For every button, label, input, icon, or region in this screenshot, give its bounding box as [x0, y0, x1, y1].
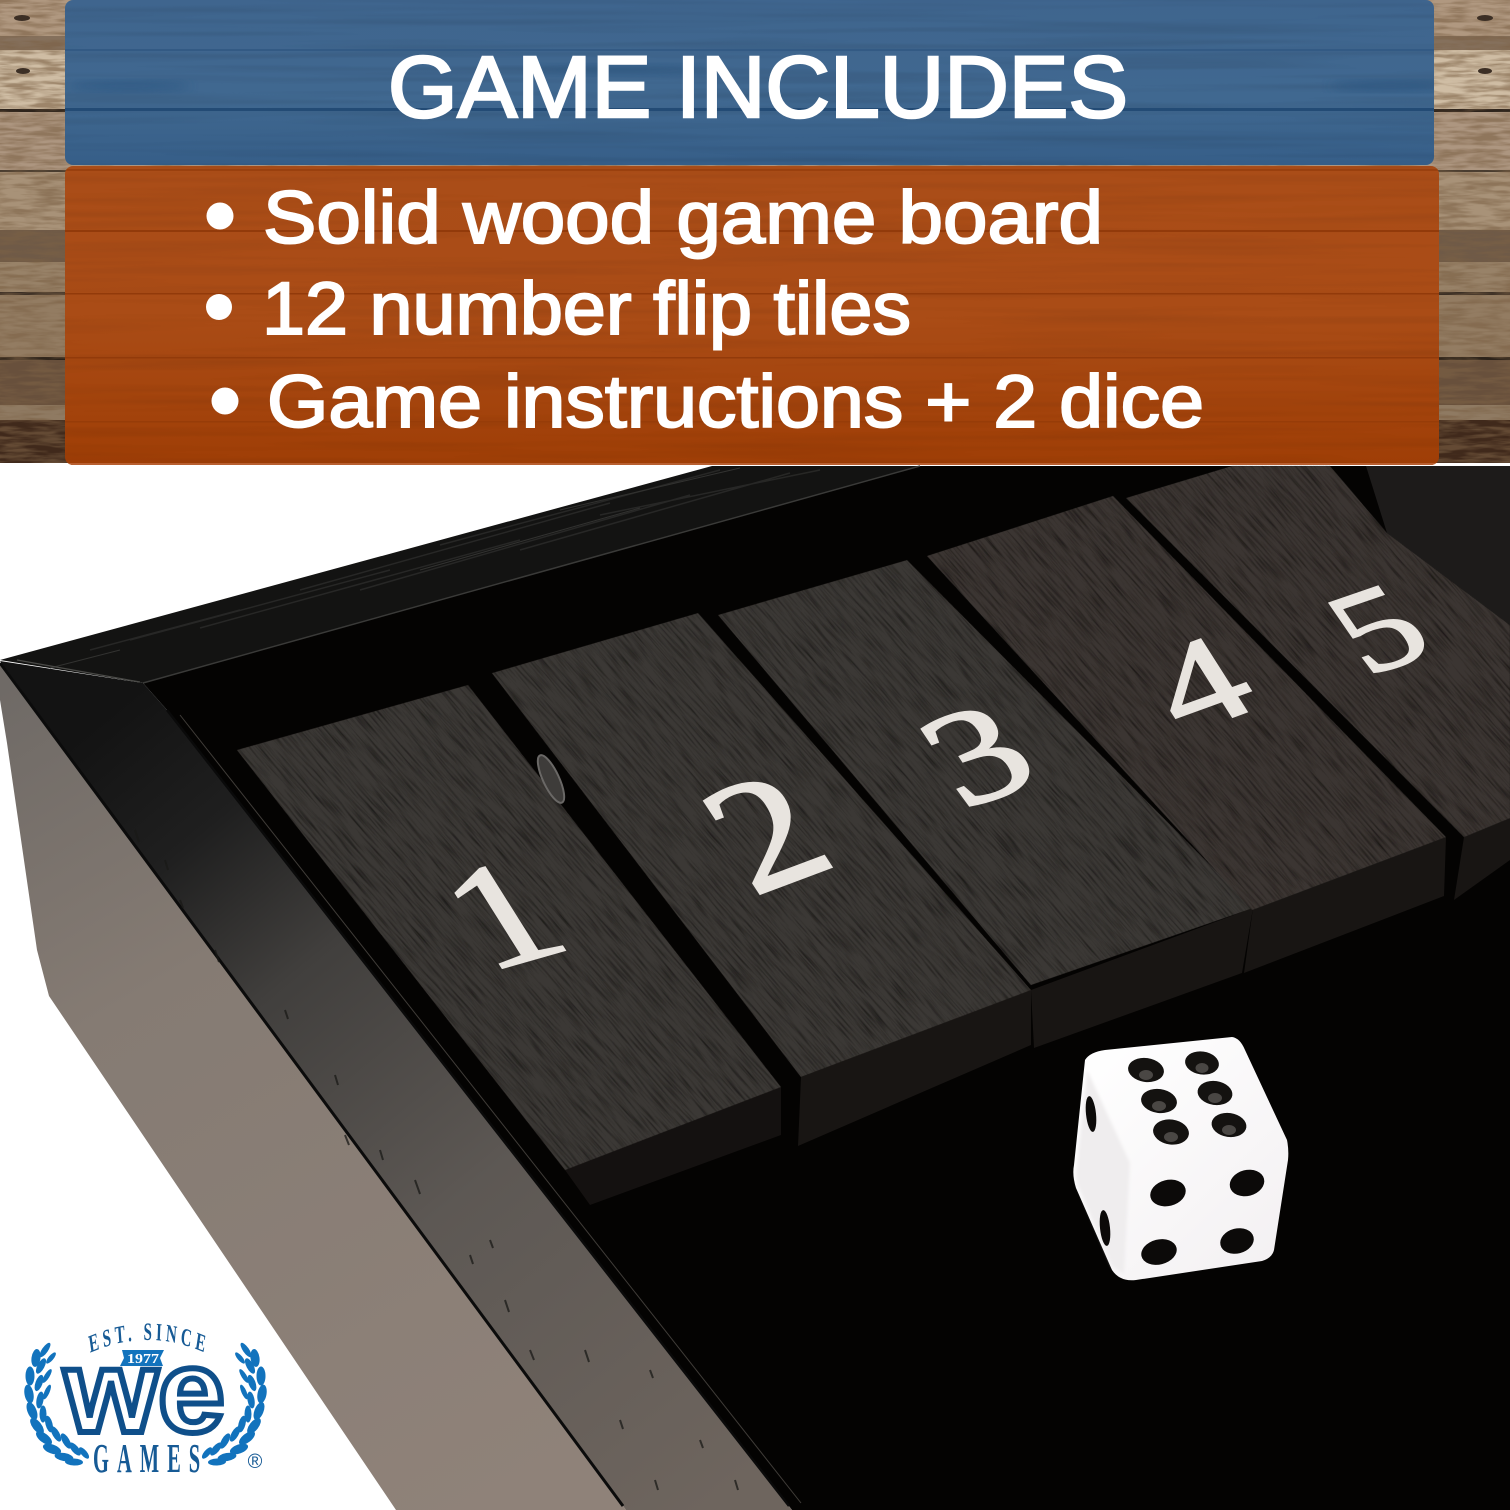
- GAMES wordmark: GAMES: [93, 1437, 208, 1482]
- tile 3 front face: [1031, 908, 1253, 1048]
- number tile 5: [1126, 363, 1510, 870]
- number tile 1: [216, 608, 802, 1230]
- WE wordmark: we: [63, 1326, 225, 1458]
- metal hinge pin: [533, 752, 569, 806]
- tile digit 5: 5: [1301, 557, 1454, 700]
- right laurel: [200, 1341, 268, 1466]
- tile digit 4: 4: [1121, 608, 1278, 759]
- WE Games logo: [24, 1323, 267, 1482]
- tile digit 1: 1: [412, 828, 594, 1002]
- die body: [1073, 1037, 1288, 1280]
- pip highlights: [1139, 1063, 1236, 1142]
- interior of box: [143, 466, 1510, 1510]
- tile 1 front face: [565, 1087, 781, 1205]
- box top rim: [0, 466, 920, 683]
- box left rim: [0, 661, 792, 1510]
- game board photograph: [0, 363, 1510, 1510]
- top rim wood streaks: [50, 468, 820, 668]
- list item: 12 number flip tiles: 12 number flip tiles: [262, 267, 911, 350]
- rim scratches: [135, 830, 738, 1490]
- number tile 3: [713, 476, 1253, 1051]
- side pips on left: [1084, 1096, 1112, 1246]
- 1977 ribbon: 1977: [127, 1352, 159, 1367]
- left laurel: [23, 1341, 91, 1466]
- rim edge highlights: [0, 466, 920, 1506]
- 1977 ribbon: [120, 1350, 164, 1367]
- panel: blue title banner: [65, 0, 1450, 165]
- tile digit 3: 3: [891, 672, 1062, 836]
- box outer side face: [0, 665, 626, 1510]
- left face shading: [1076, 1070, 1130, 1274]
- number tile 2: [468, 543, 1031, 1141]
- panel: orange contents list: [65, 166, 1439, 465]
- title: GAME INCLUDES: [388, 39, 1128, 136]
- EST. SINCE arc text: EST. SINCE: [88, 1323, 206, 1353]
- list item: game instructions and dice: Game instructions + 2 dice: [267, 360, 1204, 443]
- tile 4 front face: [1244, 837, 1446, 973]
- tile 2 front face: [798, 990, 1031, 1146]
- white die showing six and four: [1073, 1037, 1288, 1280]
- registered mark: ®: [248, 1451, 263, 1473]
- tile 5 front face: [1454, 818, 1510, 900]
- tile digit 2: 2: [670, 736, 861, 927]
- six pips on top: [1127, 1049, 1248, 1147]
- list item: solid wood game board: Solid wood game board: [263, 176, 1103, 259]
- four pips on front: [1139, 1166, 1267, 1268]
- box right inner corner: [1366, 466, 1510, 625]
- number tile 4: [927, 420, 1446, 973]
- wood plank background: [0, 0, 1510, 463]
